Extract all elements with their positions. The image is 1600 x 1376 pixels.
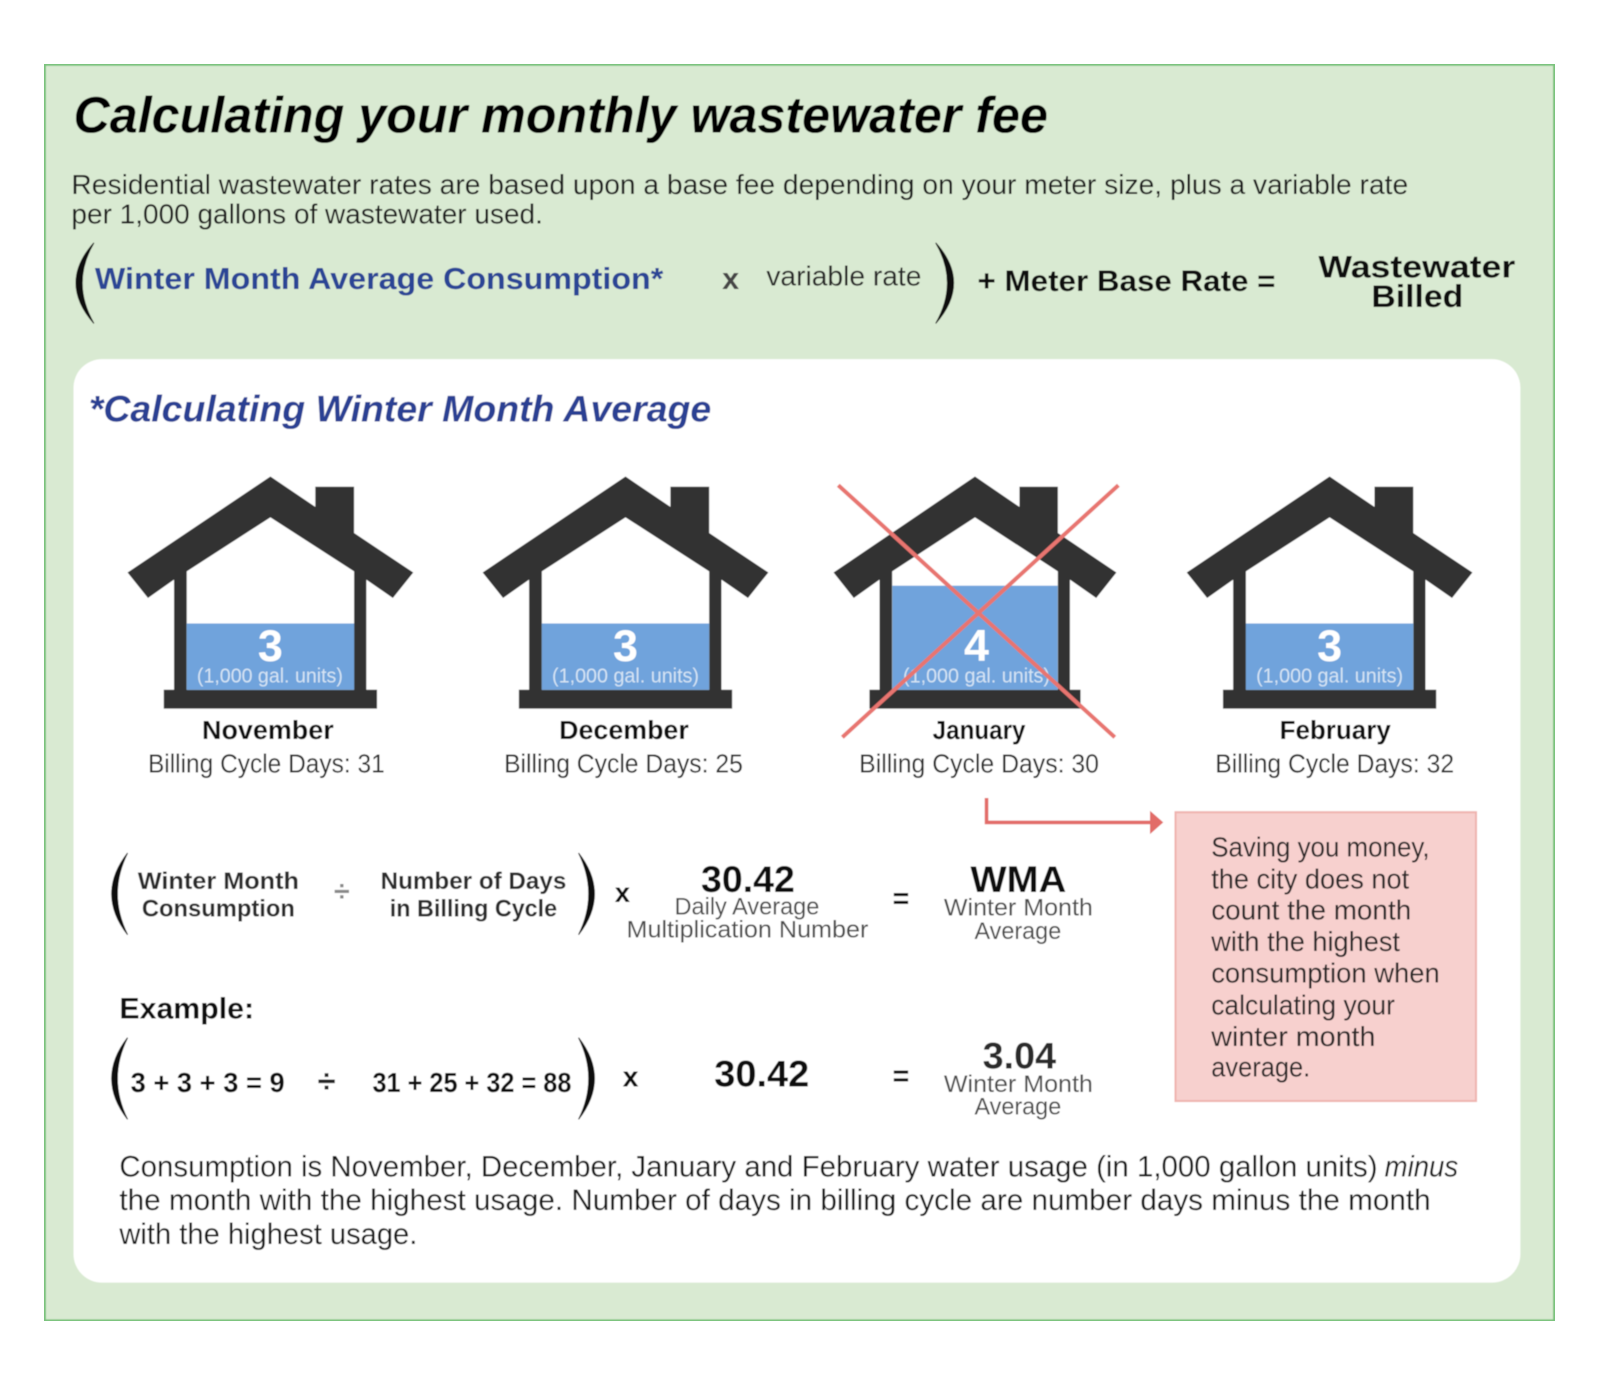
- white card: [73, 359, 1520, 1283]
- footnote: the month with the highest usage. Number of days in billing cycle are number days minus the month: [119, 1184, 1431, 1217]
- term: number of days: in Billing Cycle: [390, 895, 557, 922]
- term: number of days: [381, 868, 566, 922]
- result value: 3.04: [983, 1035, 1057, 1076]
- footnote: Consumption is November, December, January and February water usage (in 1,000 gallon units): [119, 1151, 1378, 1184]
- callout text: winter month: [1210, 1021, 1376, 1052]
- icon: house February: (1,000 gal. units): [1256, 666, 1403, 688]
- term: winter month consumption: [138, 868, 299, 922]
- arrow to callout: [987, 798, 1163, 834]
- multiplier value: 30.42: [714, 1054, 809, 1095]
- example days sum: 31 + 25 + 32 = 88: [372, 1067, 571, 1098]
- callout text: [1210, 832, 1440, 1083]
- left parenthesis: [112, 853, 128, 935]
- label December: December: [559, 717, 689, 745]
- multiplier caption: Multiplication Number: [627, 917, 868, 944]
- panel: winter month average: [73, 359, 1520, 1283]
- callout text: with the highest: [1210, 926, 1400, 957]
- title: Calculating your monthly wastewater fee: [73, 87, 1048, 144]
- icon: house November: 3: [258, 620, 283, 671]
- intro text: [71, 169, 1408, 229]
- callout text: average.: [1211, 1052, 1310, 1083]
- example formula: [112, 1035, 1093, 1120]
- billing days February: Billing Cycle Days: 32: [1215, 750, 1454, 778]
- right parenthesis: [936, 243, 954, 323]
- formula result: wastewater billed: Billed: [1371, 278, 1463, 314]
- intro text: Residential wastewater rates are based upon a base fee depending on your meter size, plus a variable rate: [71, 169, 1408, 200]
- icon: house December: (1,000 gal. units): [552, 666, 699, 688]
- icon: house February: 3: [1317, 620, 1342, 671]
- callout text: consumption when: [1211, 958, 1440, 989]
- WMA caption: Winter Month: [944, 894, 1093, 921]
- footnote: [118, 1151, 1458, 1251]
- multiplier value: 30.42: [701, 859, 795, 900]
- icon: house February: [1187, 477, 1472, 709]
- callout: [1176, 812, 1476, 1101]
- example consumption sum: 3 + 3 + 3 = 9: [131, 1067, 285, 1098]
- multiply sign: x: [623, 1062, 639, 1094]
- intro text: per 1,000 gallons of wastewater used.: [71, 198, 543, 229]
- multiply sign: x: [615, 877, 631, 908]
- WMA formula: [112, 853, 1093, 945]
- divide sign: ÷: [334, 876, 350, 908]
- WMA caption: [944, 894, 1093, 945]
- equals sign: =: [893, 883, 909, 915]
- left parenthesis: [76, 243, 94, 323]
- callout text: the city does not: [1211, 863, 1410, 894]
- icon: house December: [483, 477, 768, 709]
- WMA label: WMA: [970, 859, 1066, 900]
- result caption: [944, 1071, 1093, 1120]
- month: January: [834, 477, 1118, 778]
- callout text: calculating your: [1211, 989, 1395, 1020]
- multiplier caption: Daily Average: [674, 893, 819, 920]
- icon: house January: 4: [964, 620, 989, 671]
- label January: January: [933, 717, 1026, 745]
- heading: *Calculating Winter Month Average: [89, 388, 711, 429]
- footnote: with the highest usage.: [118, 1218, 417, 1251]
- formula result: wastewater billed: Wastewater: [1318, 249, 1515, 285]
- month: February: [1187, 477, 1472, 778]
- right parenthesis: [579, 853, 594, 935]
- billing days November: Billing Cycle Days: 31: [148, 750, 385, 778]
- result caption: Winter Month: [944, 1071, 1093, 1098]
- term: winter month consumption: Winter Month: [138, 868, 299, 895]
- left parenthesis: [112, 1038, 128, 1119]
- callout box: [1176, 812, 1476, 1101]
- WMA caption: Average: [974, 918, 1061, 945]
- formula term: variable rate: variable rate: [766, 261, 921, 292]
- divide sign: ÷: [318, 1062, 336, 1099]
- multiplier caption: [627, 893, 868, 944]
- month: November: [128, 477, 413, 778]
- icon: house January: [834, 477, 1116, 709]
- label November: November: [202, 717, 334, 745]
- term: winter month consumption: Consumption: [142, 895, 295, 922]
- billing days January: Billing Cycle Days: 30: [859, 750, 1099, 778]
- label February: February: [1280, 717, 1392, 745]
- month: December: [483, 477, 768, 778]
- callout text: Saving you money,: [1211, 832, 1430, 863]
- equals sign: =: [893, 1061, 909, 1093]
- formula term: winter month average consumption: Winter Month Average Consumption*: [95, 262, 663, 296]
- term: number of days: Number of Days: [381, 868, 566, 895]
- right parenthesis: [579, 1038, 594, 1119]
- callout text: count the month: [1211, 894, 1411, 925]
- icon: house November: (1,000 gal. units): [197, 666, 343, 688]
- result caption: Average: [974, 1093, 1061, 1120]
- formula term: meter base rate: + Meter Base Rate =: [978, 265, 1276, 298]
- icon: house December: 3: [613, 620, 638, 671]
- multiply sign: x: [722, 262, 739, 296]
- red cross: [838, 485, 1118, 737]
- formula result: wastewater billed: [1318, 249, 1515, 314]
- billing days December: Billing Cycle Days: 25: [504, 750, 743, 778]
- footnote: minus: [1385, 1151, 1458, 1184]
- example heading: Example:: [119, 992, 254, 1025]
- main formula: [76, 243, 1515, 323]
- icon: house November: [128, 477, 413, 709]
- icon: house January: (1,000 gal. units): [903, 666, 1050, 688]
